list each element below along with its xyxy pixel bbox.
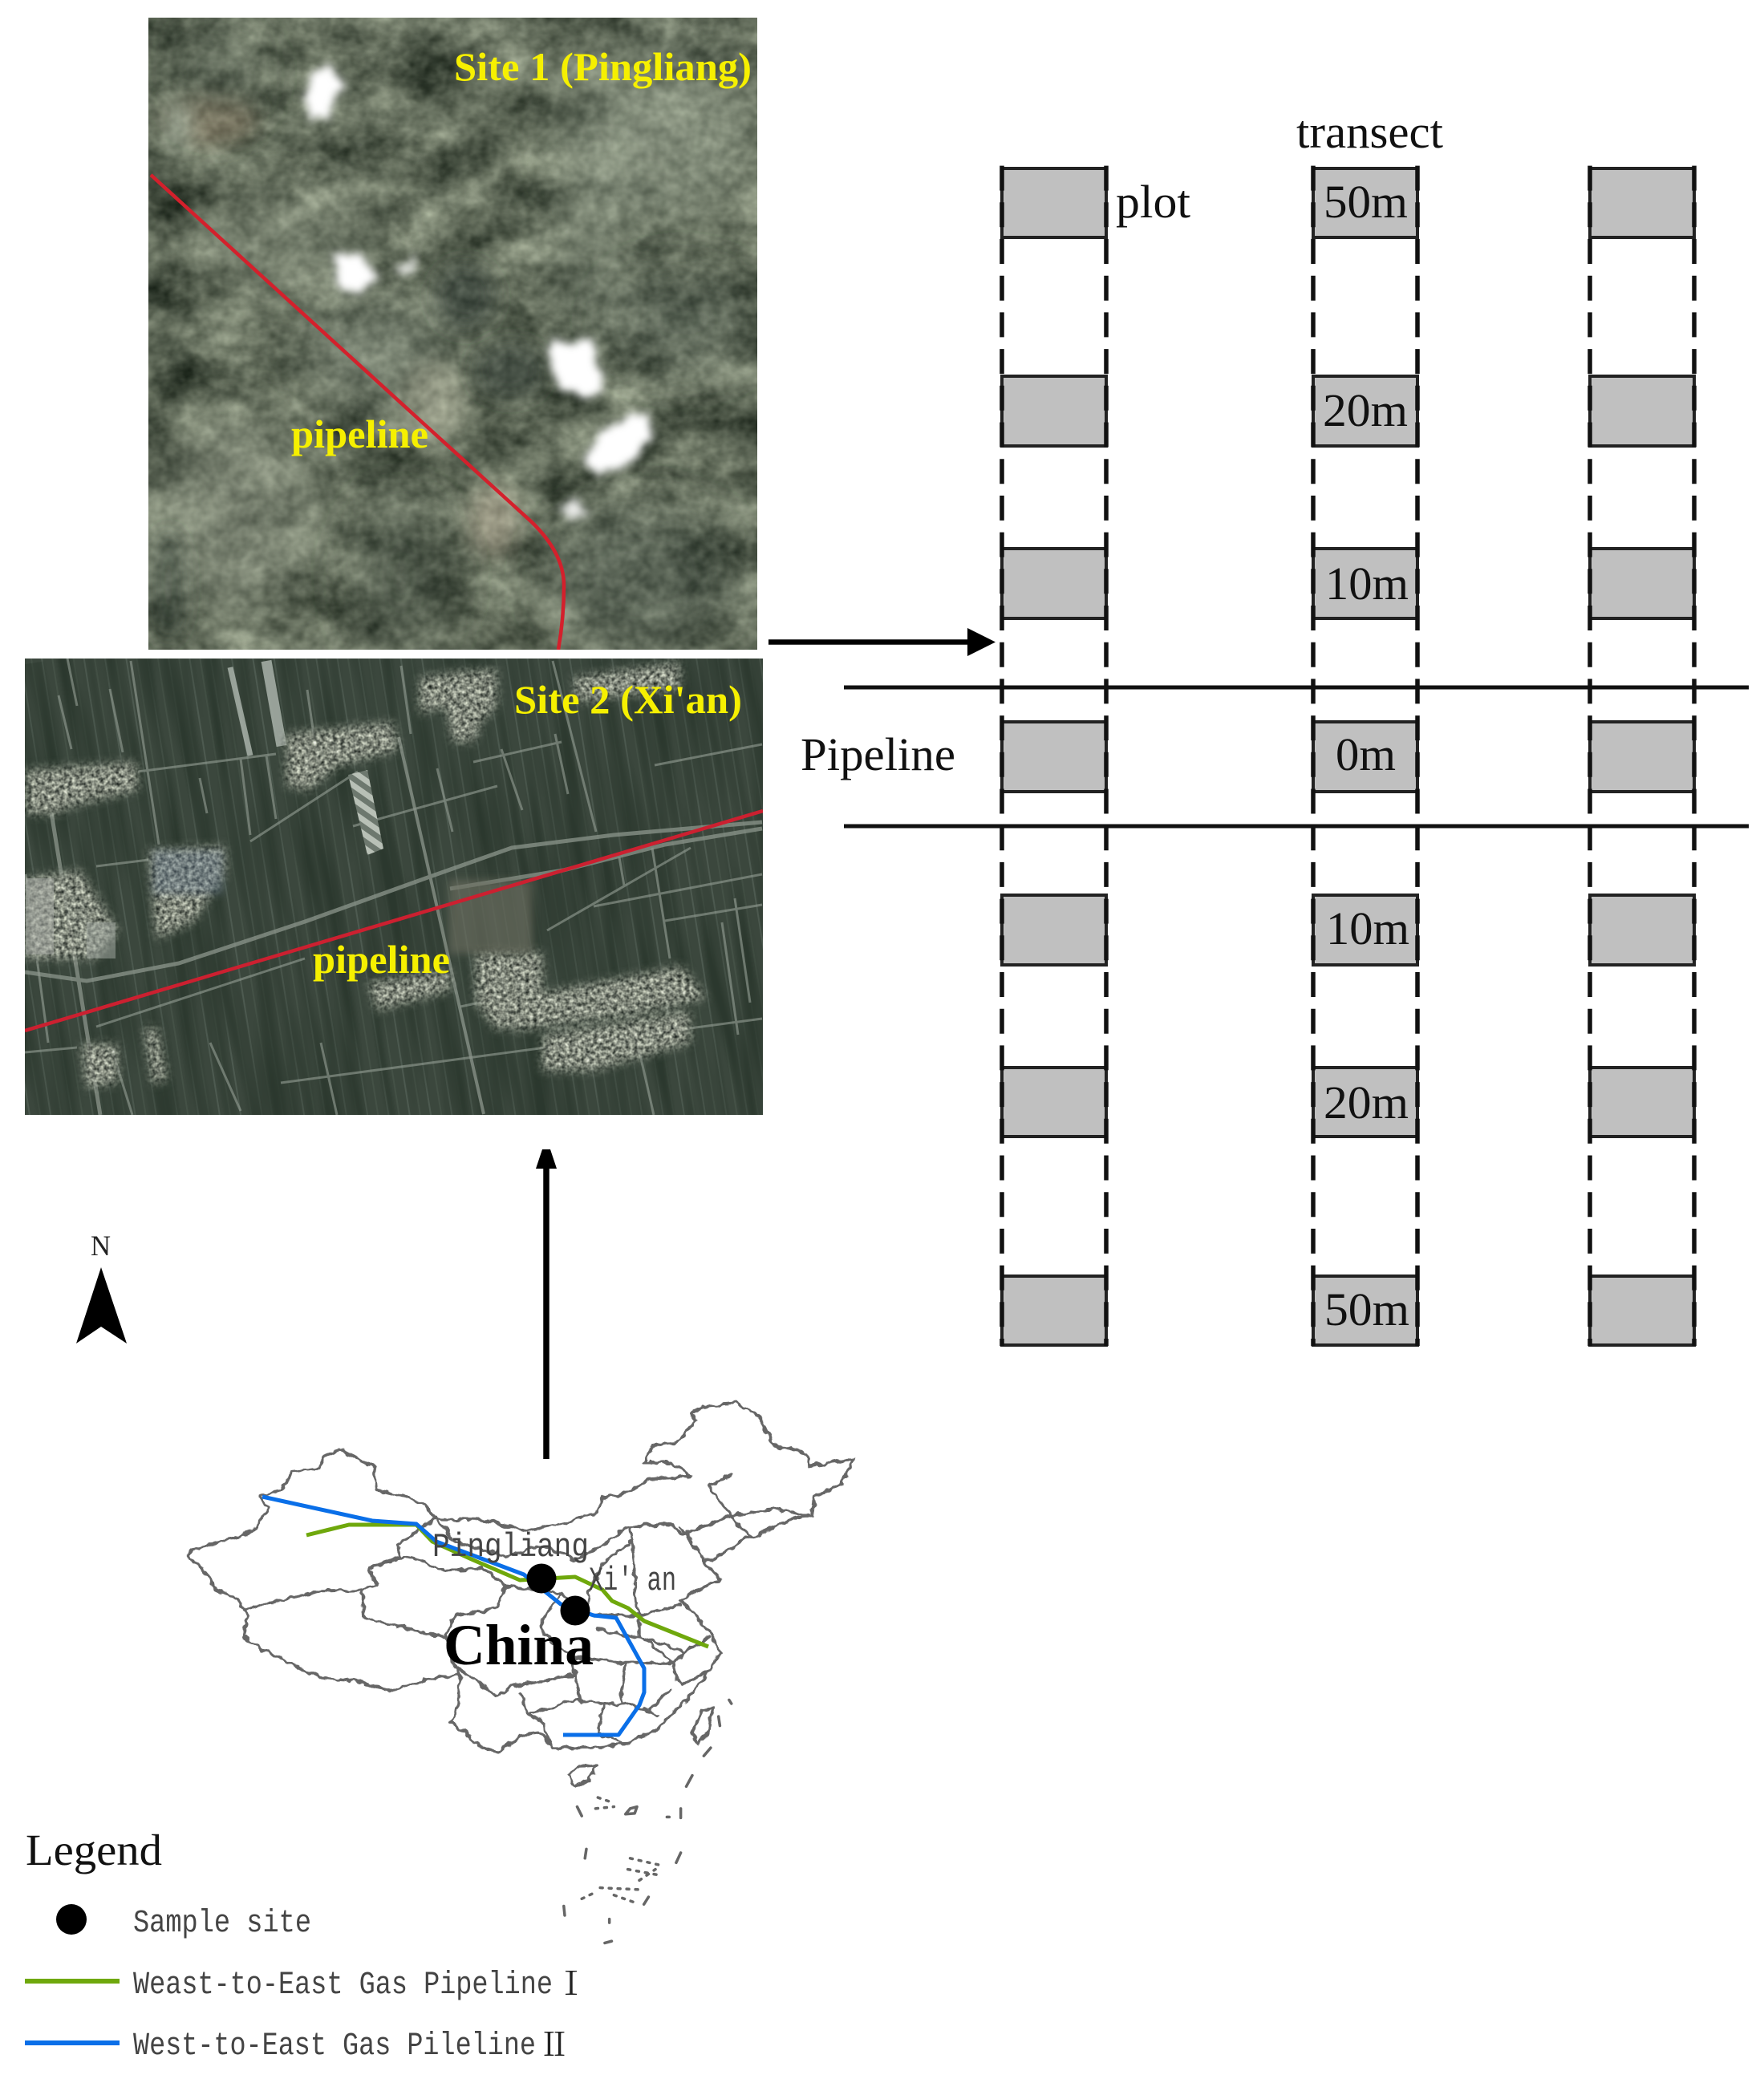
legend bbox=[25, 1826, 587, 2065]
pipeline corridor lines bbox=[844, 687, 1749, 826]
legend item: pipeline II: Ⅱ bbox=[538, 2020, 570, 2065]
label: pipeline, site 1: pipeline bbox=[291, 411, 428, 456]
label: plot: plot bbox=[1116, 176, 1190, 228]
field boundaries bbox=[25, 659, 762, 1115]
pipeline II line bbox=[262, 1497, 644, 1735]
label: site 2: Site 2 (Xi'an) bbox=[514, 677, 742, 722]
legend item: pipeline I: Weast-to-East Gas Pipeline bbox=[133, 1968, 553, 2004]
label: N: N bbox=[91, 1230, 111, 1262]
legend item: sample site bbox=[56, 1904, 311, 1942]
transect column 2 bbox=[1313, 166, 1417, 1346]
label: Xi'an: Xi' an bbox=[589, 1562, 676, 1600]
heading: transect: transect bbox=[1296, 106, 1443, 158]
pale strips bbox=[230, 661, 282, 756]
hatched plots and bare ground bbox=[26, 770, 533, 958]
legend item: pipeline I: Ⅰ bbox=[555, 1959, 587, 2004]
legend item: sample site: Sample site bbox=[133, 1906, 311, 1942]
legend title: Legend bbox=[26, 1826, 162, 1874]
satellite terrain bbox=[148, 18, 757, 650]
distance labels: 20m bbox=[1324, 1076, 1409, 1129]
label: China: China bbox=[444, 1613, 594, 1677]
legend item: pipeline I bbox=[25, 1959, 587, 2004]
icon: north arrow bbox=[76, 1230, 127, 1343]
South China Sea islands bbox=[564, 1700, 732, 1943]
panel: site 1 satellite image bbox=[148, 18, 758, 658]
label: pipeline, site 2: pipeline bbox=[313, 937, 450, 982]
legend item: pipeline II bbox=[25, 2020, 570, 2065]
arrow: map to site images bbox=[536, 1149, 557, 1459]
sample site: Xi'an bbox=[560, 1596, 590, 1625]
sample site: Pingliang bbox=[526, 1564, 557, 1593]
panel: site 2 satellite image bbox=[25, 659, 763, 1115]
panel: transect layout diagram bbox=[801, 106, 1749, 1346]
main roads bbox=[25, 737, 762, 1115]
field strips background bbox=[25, 659, 763, 1115]
texture overlay bbox=[148, 18, 757, 650]
distance labels: 50m bbox=[1324, 1283, 1409, 1335]
distance labels bbox=[1323, 176, 1409, 1335]
clouds bbox=[303, 66, 653, 520]
legend item: pipeline II: West-to-East Gas Pileline bbox=[133, 2028, 536, 2065]
pipeline line, site 1 bbox=[151, 175, 564, 650]
villages bbox=[26, 662, 706, 1088]
label: site 1: Site 1 (Pingliang) bbox=[454, 44, 752, 89]
map: China with pipelines and sample sites bbox=[188, 1404, 854, 1943]
distance labels: 20m bbox=[1323, 384, 1408, 436]
pipeline line, site 2 bbox=[25, 811, 763, 1031]
arrow: site images to transect layout bbox=[768, 628, 996, 656]
distance labels: 10m bbox=[1325, 557, 1409, 610]
darker field streaks bbox=[25, 659, 763, 1115]
transect column 3 bbox=[1590, 166, 1694, 1346]
provinces and border bbox=[188, 1404, 854, 1785]
light and dark land cover bbox=[151, 24, 758, 658]
label: Pipeline: Pipeline bbox=[801, 728, 955, 780]
distance labels: 50m bbox=[1324, 176, 1408, 228]
distance labels: 0m bbox=[1336, 728, 1396, 780]
pipeline I line bbox=[306, 1525, 708, 1647]
label: Pingliang: Pingliang bbox=[432, 1528, 589, 1566]
distance labels: 10m bbox=[1326, 902, 1409, 954]
transect column 1 bbox=[1002, 166, 1106, 1346]
